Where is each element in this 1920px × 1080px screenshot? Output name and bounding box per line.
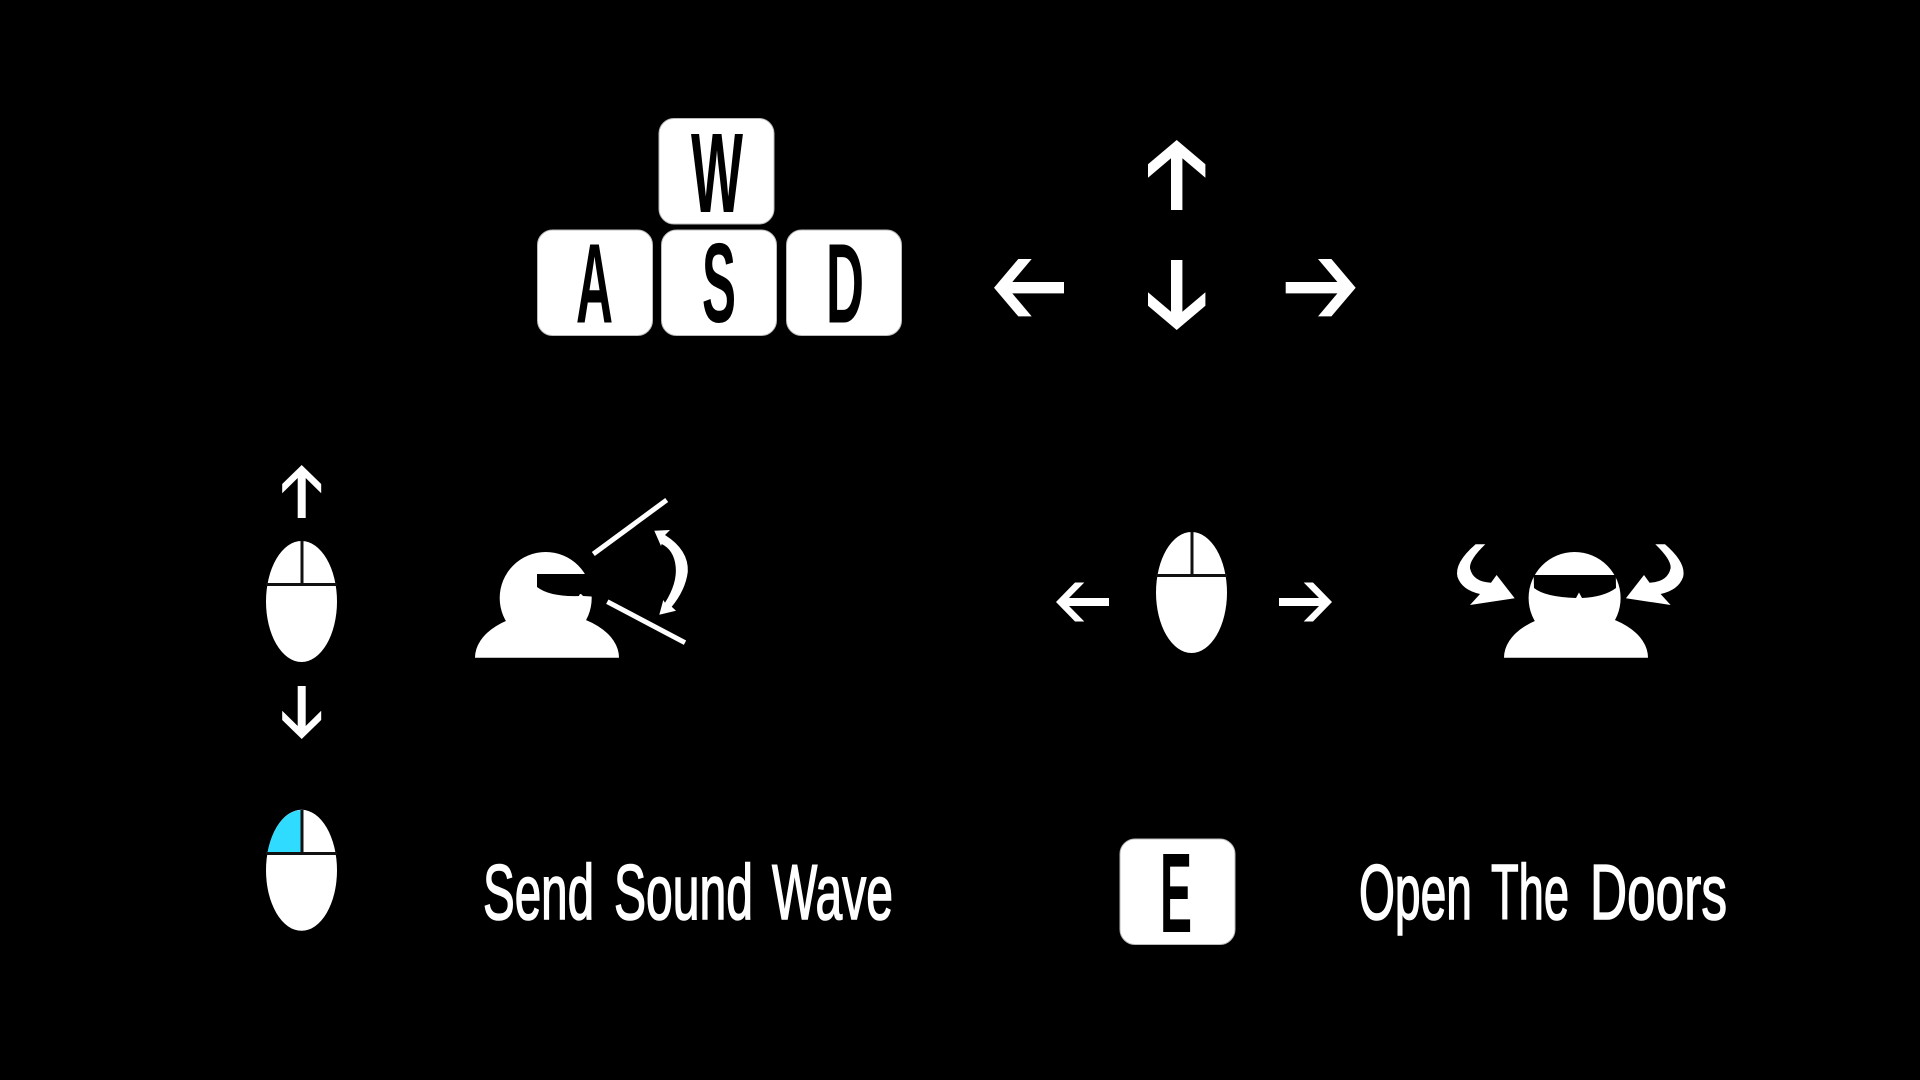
arrow: mouse up (282, 465, 321, 518)
label: open the doors: Doors (1590, 848, 1727, 936)
key E (1120, 830, 1235, 956)
arrow: down (1148, 260, 1205, 330)
label: send sound wave: Send (483, 848, 594, 936)
arrow: mouse right (1279, 582, 1332, 622)
key S: S (702, 220, 736, 346)
visor (1534, 575, 1616, 598)
key S (662, 220, 776, 346)
key W: W (691, 110, 743, 236)
label: open the doors: The (1491, 848, 1569, 936)
arrow: curved up and down (654, 530, 688, 615)
label: send sound wave: Sound (614, 848, 753, 936)
arrow: up (1148, 140, 1205, 210)
key A: A (576, 220, 613, 346)
icon: person looking up and down (475, 500, 688, 658)
arrow: mouse left (1056, 582, 1109, 622)
arrow: curved right (1626, 544, 1684, 605)
arrow: curved left (1457, 544, 1515, 605)
label: send sound wave: Wave (772, 848, 893, 936)
mouse vertical movement (266, 465, 337, 739)
person body and head (1504, 613, 1648, 658)
visor (537, 574, 600, 597)
mouse horizontal movement (1056, 532, 1332, 653)
person body and head (475, 613, 619, 658)
view cone upper line (593, 500, 667, 554)
key A (538, 220, 652, 346)
icon: person looking left and right (1457, 544, 1684, 658)
icon: mouse left button highlighted (266, 810, 337, 931)
direction arrows (994, 140, 1356, 330)
key W (659, 110, 774, 236)
view cone lower line (607, 602, 685, 643)
key E: E (1160, 830, 1192, 956)
icon: mouse (266, 541, 337, 662)
arrow: mouse down (282, 686, 321, 739)
WASD keys (538, 110, 902, 346)
key D (786, 220, 902, 346)
icon: mouse (1156, 532, 1227, 653)
label: open the doors: Open (1359, 848, 1472, 936)
arrow: left (994, 259, 1064, 316)
arrow: right (1286, 259, 1356, 316)
key D: D (826, 220, 864, 346)
